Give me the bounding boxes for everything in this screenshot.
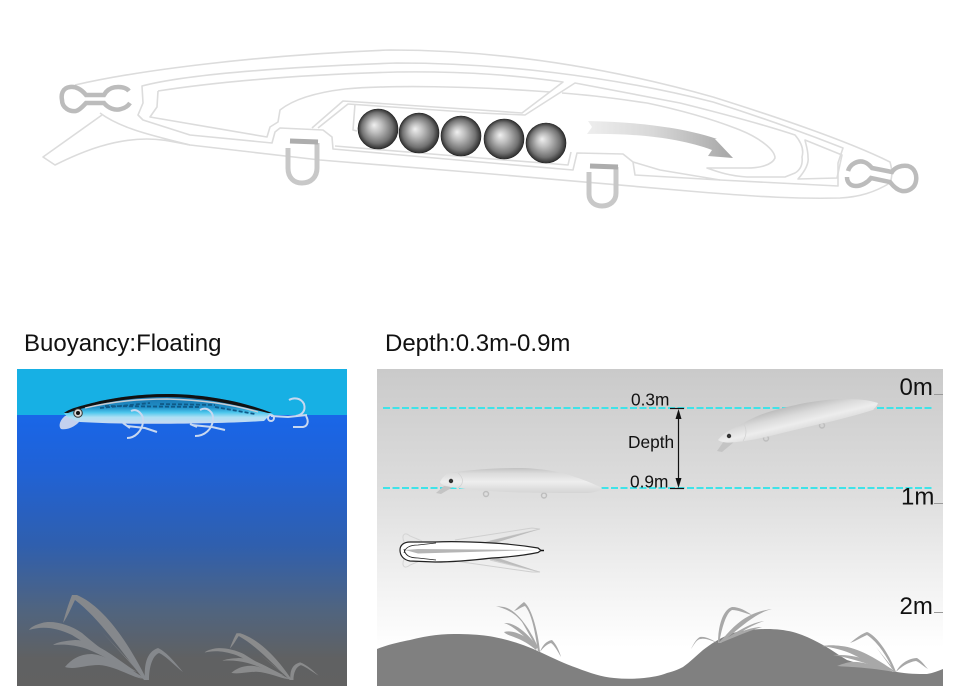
eye [74, 409, 82, 417]
water column [17, 415, 347, 686]
depth labels [628, 390, 674, 492]
grey lure level [436, 468, 602, 498]
depth labels: 0.3m [631, 390, 669, 410]
icon: rear belly hook eye [589, 166, 618, 206]
depth line 0.3m [383, 407, 933, 409]
icon: front belly hook eye [288, 141, 318, 183]
depth labels: Depth [628, 432, 674, 452]
arrow: ball movement toward tail [587, 121, 733, 158]
lure top view [400, 528, 544, 572]
icon: front tow eye [62, 87, 130, 111]
scale ticks [934, 394, 943, 612]
weed: hill one [496, 602, 561, 657]
colored floating lure [60, 394, 308, 438]
scale labels: 1m [901, 484, 934, 510]
seabed terrain [377, 629, 943, 686]
scale labels [900, 374, 934, 620]
weed: left clump [29, 595, 183, 680]
depth background [377, 369, 943, 686]
sky band [17, 369, 347, 415]
heading: depth: Depth:0.3m-0.9m [385, 330, 570, 357]
scale labels: 2m [900, 593, 933, 620]
depth line 0.9m [383, 487, 933, 489]
weed: hill three [822, 632, 928, 672]
panel: lure cutaway diagram [43, 50, 916, 206]
panel: floating water scene [17, 369, 347, 686]
depth labels: 0.9m [630, 472, 668, 492]
treble hooks [123, 398, 308, 438]
heading: buoyancy: Buoyancy:Floating [24, 330, 221, 357]
grey lure diving [717, 399, 878, 452]
depth range arrow [670, 408, 684, 488]
weight balls [358, 109, 566, 163]
scale labels: 0m [900, 374, 933, 401]
weed: hill two [691, 607, 772, 649]
weed: right clump [205, 633, 319, 680]
lure body outlines [43, 50, 892, 198]
panel: depth scene [377, 369, 943, 686]
icon: rear tow eye [847, 161, 916, 191]
